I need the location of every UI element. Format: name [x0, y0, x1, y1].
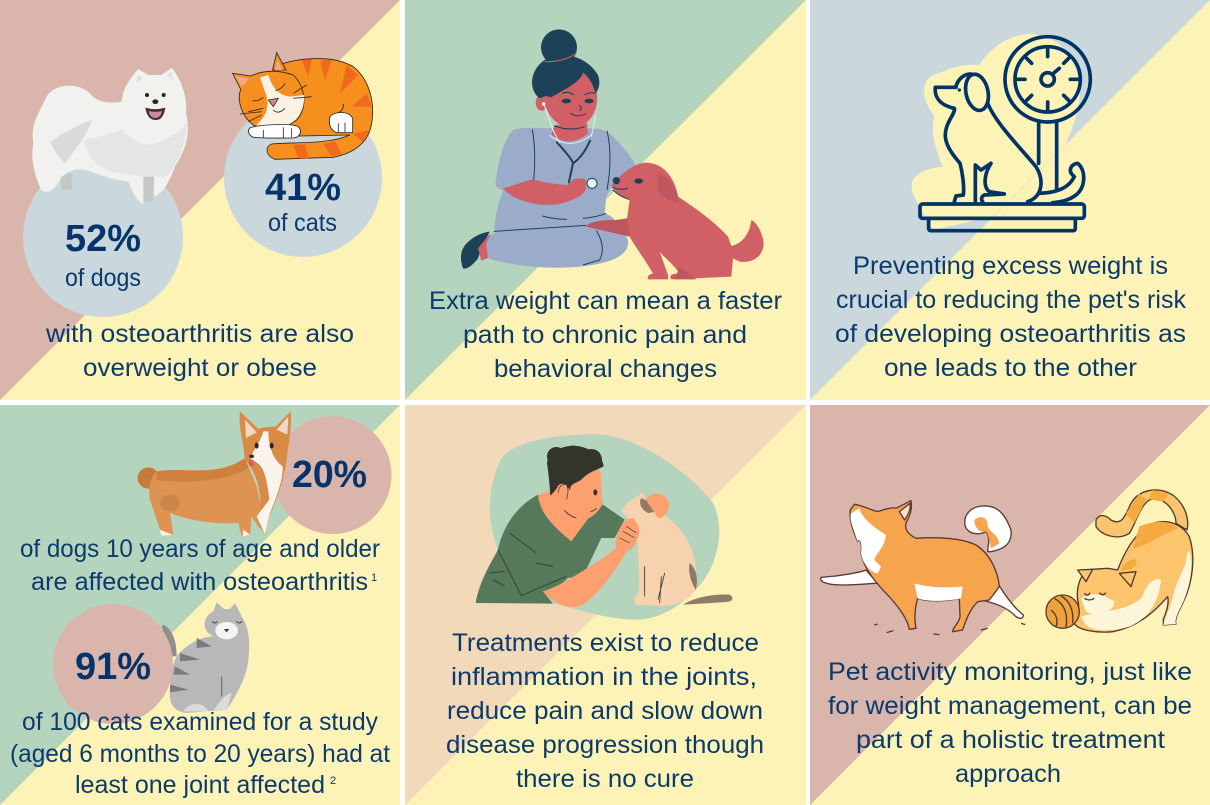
text: dogs prevalence caption: of dogs 10 years of age and older	[20, 535, 380, 563]
text: dogs prevalence caption: 1	[371, 572, 377, 584]
text: treatments caption: reduce pain and slow down	[447, 697, 763, 725]
panel: preventing excess weight	[810, 0, 1210, 400]
icon: vet examining a cat	[476, 434, 733, 620]
text: activity monitoring caption: part of a holistic treatment	[856, 726, 1165, 754]
icon: dog sitting on a weighing scale	[912, 34, 1090, 231]
icon: grey tabby cat	[162, 602, 249, 713]
icon: white spitz dog	[32, 68, 188, 204]
text: 41% of cats	[265, 167, 341, 237]
text: activity monitoring caption: for weight management, can be	[828, 692, 1192, 720]
text: overweight caption: overweight or obese	[83, 354, 317, 382]
text: treatments caption	[446, 629, 764, 793]
icon: corgi dog	[138, 411, 291, 536]
text: 52% of dogs: of dogs	[65, 264, 141, 292]
text: extra weight caption: Extra weight can mean a faster	[429, 287, 782, 315]
text: preventing excess weight caption: one leads to the other	[884, 354, 1137, 382]
icon: orange cat stretching with a ball of yarn	[1046, 490, 1193, 632]
text: cats prevalence caption: least one joint affected	[75, 771, 325, 799]
text: treatments caption: inflammation in the joints,	[451, 663, 757, 691]
icon: orange dog walking	[821, 501, 1025, 635]
text: dogs prevalence caption: are affected with osteoarthritis	[31, 568, 368, 596]
panel: treatments	[405, 405, 806, 805]
text: 41% of cats: of cats	[268, 209, 337, 237]
text: cats prevalence caption: (aged 6 months to 20 years) had at	[10, 740, 390, 768]
text: cats prevalence caption: 2	[330, 775, 336, 787]
text: treatments caption: there is no cure	[516, 765, 694, 793]
panel: overweight statistics	[0, 0, 400, 400]
icon: nurse examining a dog	[461, 29, 764, 279]
text: activity monitoring caption: Pet activity monitoring, just like	[828, 658, 1192, 686]
text: preventing excess weight caption: Preventing excess weight is	[853, 252, 1168, 280]
text: preventing excess weight caption: of developing osteoarthritis as	[835, 320, 1186, 348]
text: treatments caption: disease progression though	[446, 731, 764, 759]
text: preventing excess weight caption: crucial to reducing the pet's risk	[836, 286, 1186, 314]
text: 91%: 91%	[75, 646, 151, 688]
text: activity monitoring caption	[828, 658, 1192, 788]
text: 20%: 20%	[292, 454, 367, 496]
icon: sleeping orange cat	[233, 53, 373, 159]
circle: dogs statistic	[23, 157, 183, 317]
text: overweight caption: with osteoarthritis are also	[45, 320, 354, 348]
text: overweight caption	[45, 320, 354, 382]
text: 41% of cats: 41%	[265, 167, 341, 209]
text: dogs prevalence caption	[20, 535, 380, 596]
text: extra weight caption: path to chronic pain and	[463, 321, 747, 349]
text: 52% of dogs: 52%	[65, 218, 141, 260]
circle: 20% statistic	[274, 416, 392, 534]
panel: prevalence statistics	[0, 405, 400, 805]
text: treatments caption: Treatments exist to reduce	[452, 629, 759, 657]
circle: 91% statistic	[53, 604, 173, 724]
panel: faster path to chronic pain	[405, 0, 806, 400]
text: cats prevalence caption	[10, 708, 390, 799]
text: extra weight caption: behavioral changes	[494, 355, 717, 383]
circle: cats statistic	[224, 99, 382, 257]
text: 52% of dogs	[65, 218, 141, 292]
text: preventing excess weight caption	[835, 252, 1186, 382]
text: cats prevalence caption: of 100 cats examined for a study	[22, 708, 378, 736]
panel: activity monitoring	[810, 405, 1210, 805]
text: activity monitoring caption: approach	[955, 760, 1061, 788]
text: extra weight caption	[429, 287, 782, 383]
